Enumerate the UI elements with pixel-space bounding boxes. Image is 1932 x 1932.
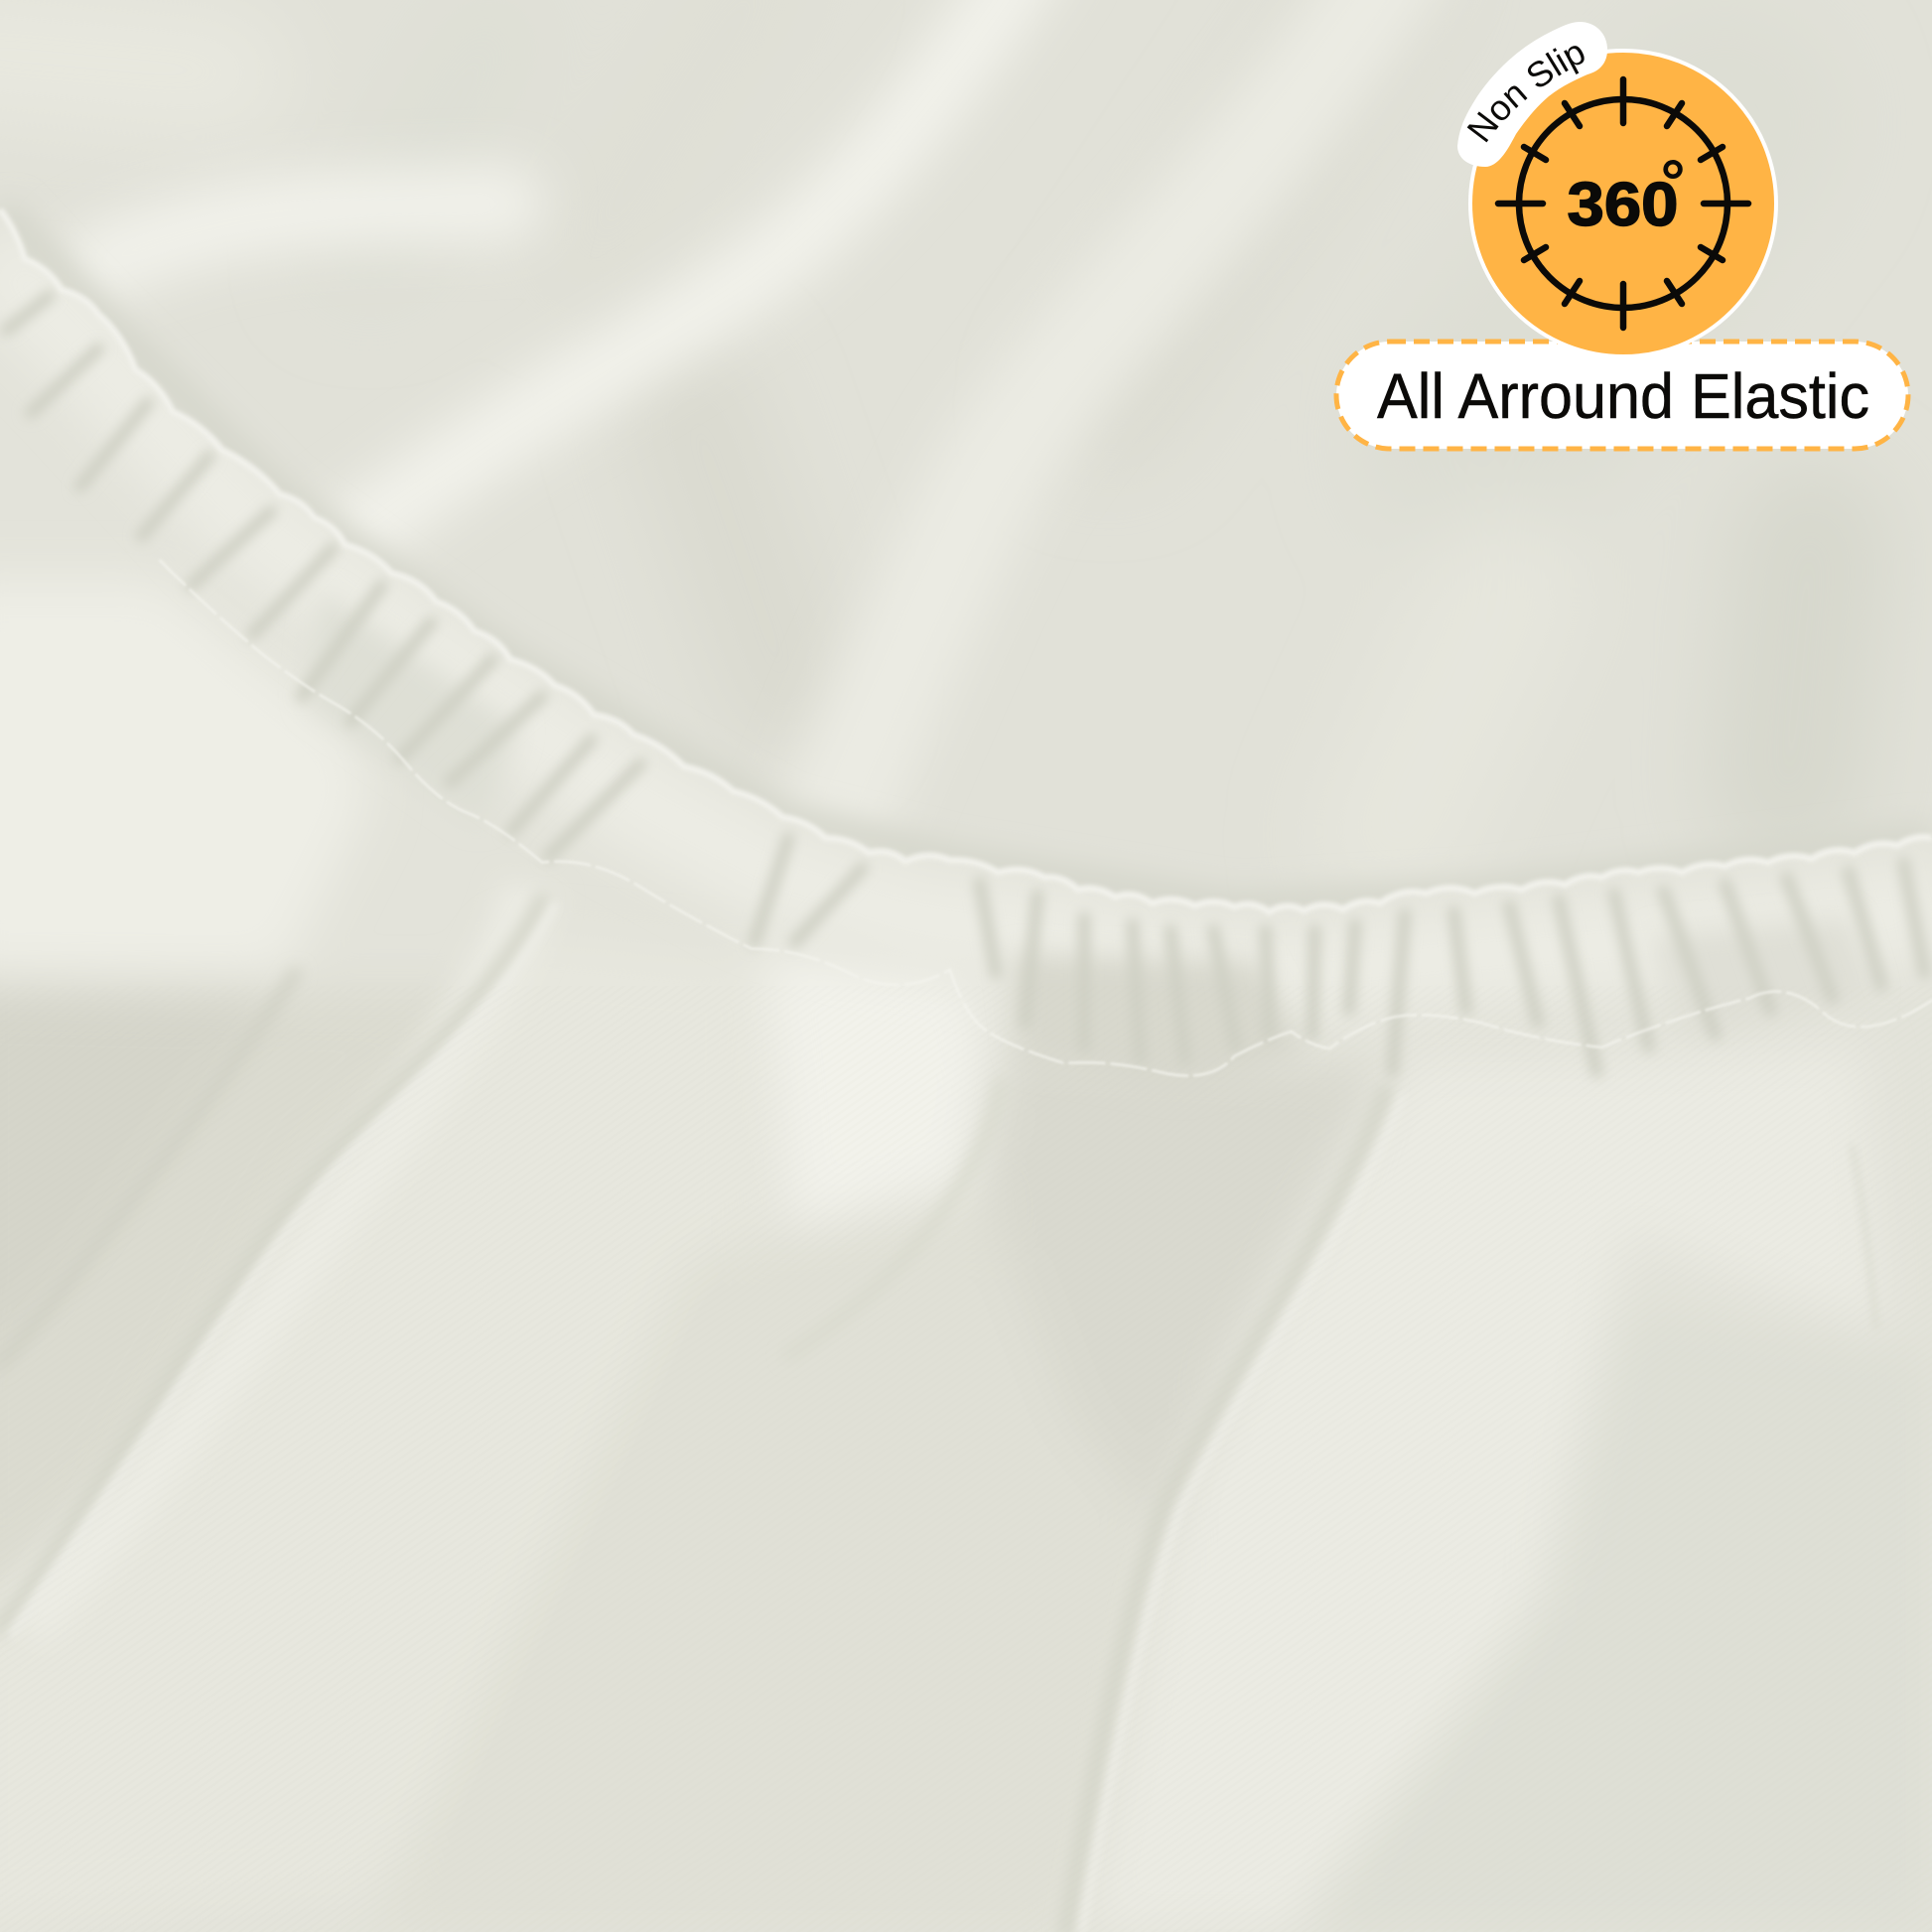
- contact shadow along the elastic: [0, 209, 1932, 906]
- orange disc: [1470, 51, 1776, 356]
- sharp fold creases: shadow side: [0, 899, 1386, 1932]
- shaded pleat zones: [324, 610, 1853, 1061]
- elastic pleats: shadows: [6, 296, 1925, 1072]
- bright fold ridge: [83, 899, 522, 1548]
- stitched hem line: [160, 561, 1932, 1076]
- non slip tag: [1457, 22, 1607, 167]
- sharp fold creases: lit side: [14, 1122, 1210, 1928]
- badge: orange 360 degree circle: [1470, 51, 1776, 356]
- elastic top edge: [0, 209, 1932, 911]
- gathered band highlight: [0, 246, 1932, 973]
- fine weave texture: [0, 986, 1932, 1932]
- tag text: Non Slip: [1467, 46, 1585, 143]
- degree sign: °: [1661, 148, 1685, 216]
- 360 label: 360: [1567, 171, 1678, 239]
- dashed pill outline: [1336, 342, 1908, 449]
- caption text: All Arround Elastic: [1377, 360, 1869, 432]
- caption pill: [1336, 342, 1908, 449]
- tag shape: [1457, 22, 1607, 167]
- icon: compass ring with ticks: [1498, 79, 1748, 328]
- large fold shading: [0, 579, 1932, 1932]
